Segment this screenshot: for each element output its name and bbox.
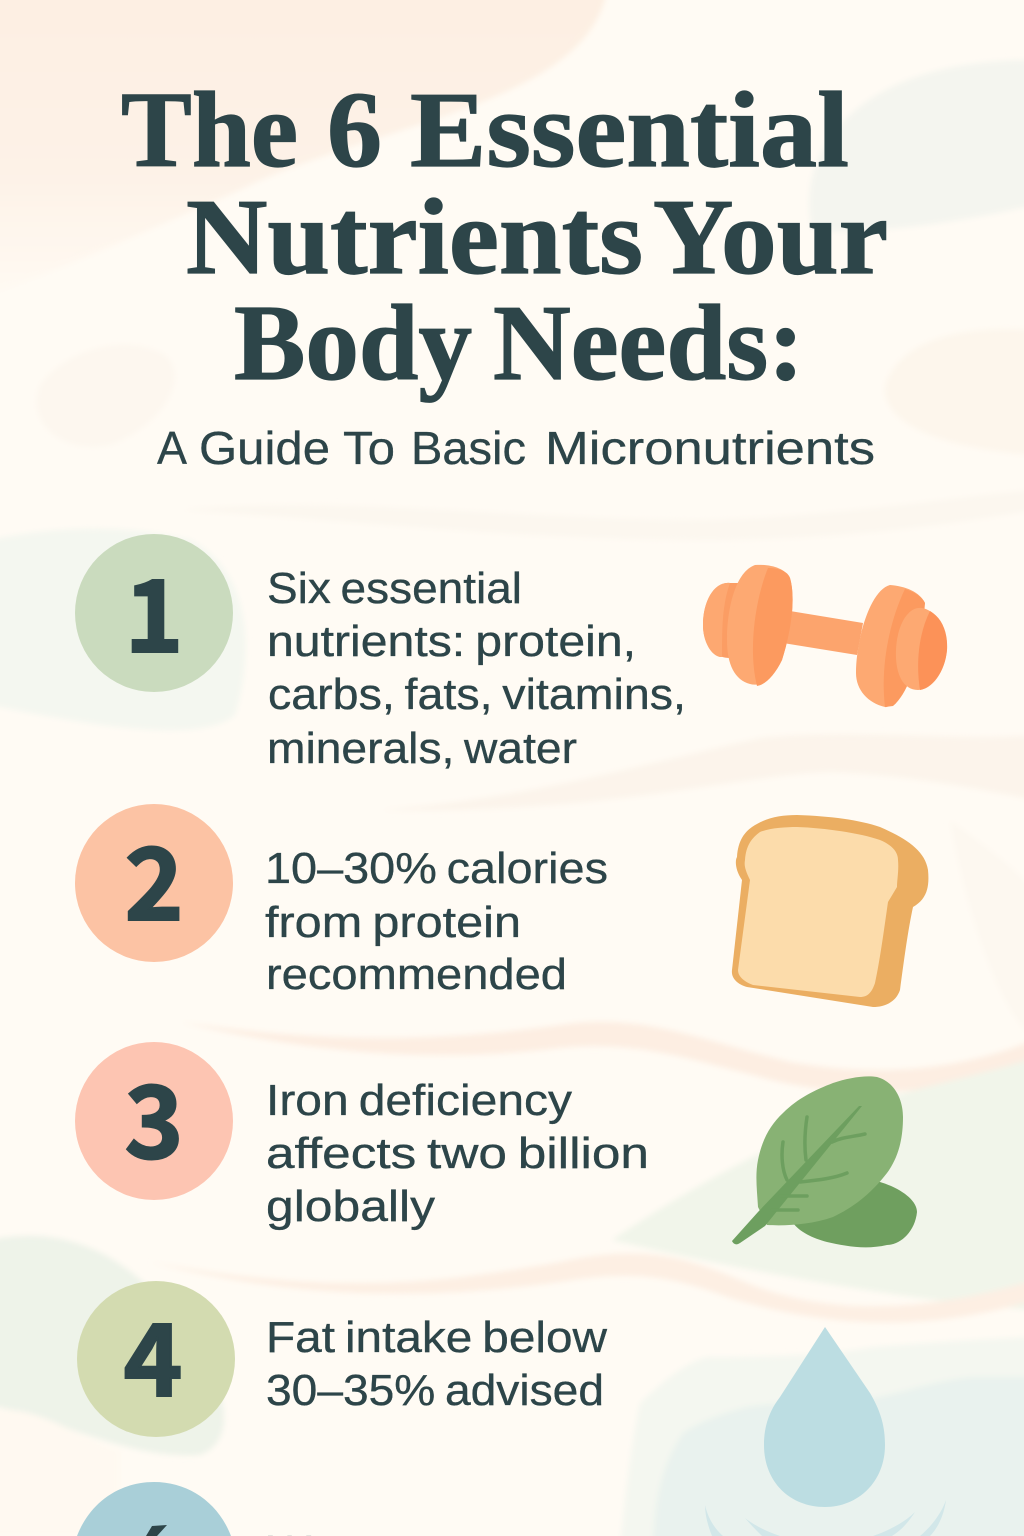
subtitle: Basic	[411, 422, 526, 474]
text: protein calories: recommended	[266, 950, 567, 999]
item 3	[75, 1042, 917, 1247]
text: iron deficiency: globally	[266, 1182, 435, 1231]
item 4	[77, 1280, 946, 1536]
icon: bread slice	[732, 815, 928, 1007]
title: The	[121, 71, 298, 190]
number badge 4: 4	[124, 1280, 182, 1425]
title: Your	[653, 178, 888, 297]
icon: water drop with ripples	[705, 1327, 946, 1536]
text: six essential nutrients: nutrients: protein,	[267, 617, 636, 666]
item 5	[77, 1482, 388, 1536]
icon: dumbbell	[703, 565, 947, 707]
text: iron deficiency	[266, 1076, 649, 1231]
text: fat intake: Fat intake below	[266, 1313, 607, 1362]
title: 6	[327, 71, 382, 190]
number badge 3: 3	[124, 1042, 184, 1187]
item 1	[75, 534, 947, 773]
title	[121, 71, 888, 403]
text: six essential nutrients	[267, 564, 686, 773]
number badge 2	[75, 804, 233, 962]
subtitle: A	[157, 422, 187, 474]
item 2	[75, 804, 928, 1007]
number badge 2: 2	[124, 804, 184, 949]
text: iron deficiency: Iron deficiency	[266, 1076, 572, 1125]
subtitle: Micronutrients	[545, 422, 875, 474]
title: Body	[234, 284, 472, 403]
number badge 1: 1	[124, 536, 184, 681]
text: six essential nutrients: carbs, fats, vitamins,	[268, 670, 686, 719]
text: protein calories: 10–30% calories	[265, 844, 608, 893]
subtitle: Guide	[199, 422, 330, 474]
text: protein calories	[265, 844, 608, 999]
text: protein calories: from protein	[265, 898, 521, 947]
subtitle	[157, 422, 875, 474]
number badge 4	[77, 1280, 235, 1437]
text: fat intake	[266, 1313, 607, 1415]
text: six essential nutrients: minerals, water	[267, 724, 577, 773]
number badge 3	[75, 1042, 233, 1200]
number badge 1	[75, 534, 233, 692]
title: Needs:	[493, 284, 804, 403]
icon: spinach leaves	[732, 1076, 917, 1247]
text: iron deficiency: affects two billion	[266, 1129, 649, 1178]
title: Nutrients	[186, 178, 643, 297]
title: Essential	[410, 71, 849, 190]
subtitle: To	[343, 422, 395, 474]
text: fat intake: 30–35% advised	[266, 1366, 604, 1415]
number badge 5 (cropped by page edge)	[77, 1482, 231, 1536]
text: six essential nutrients: Six essential	[267, 564, 522, 613]
